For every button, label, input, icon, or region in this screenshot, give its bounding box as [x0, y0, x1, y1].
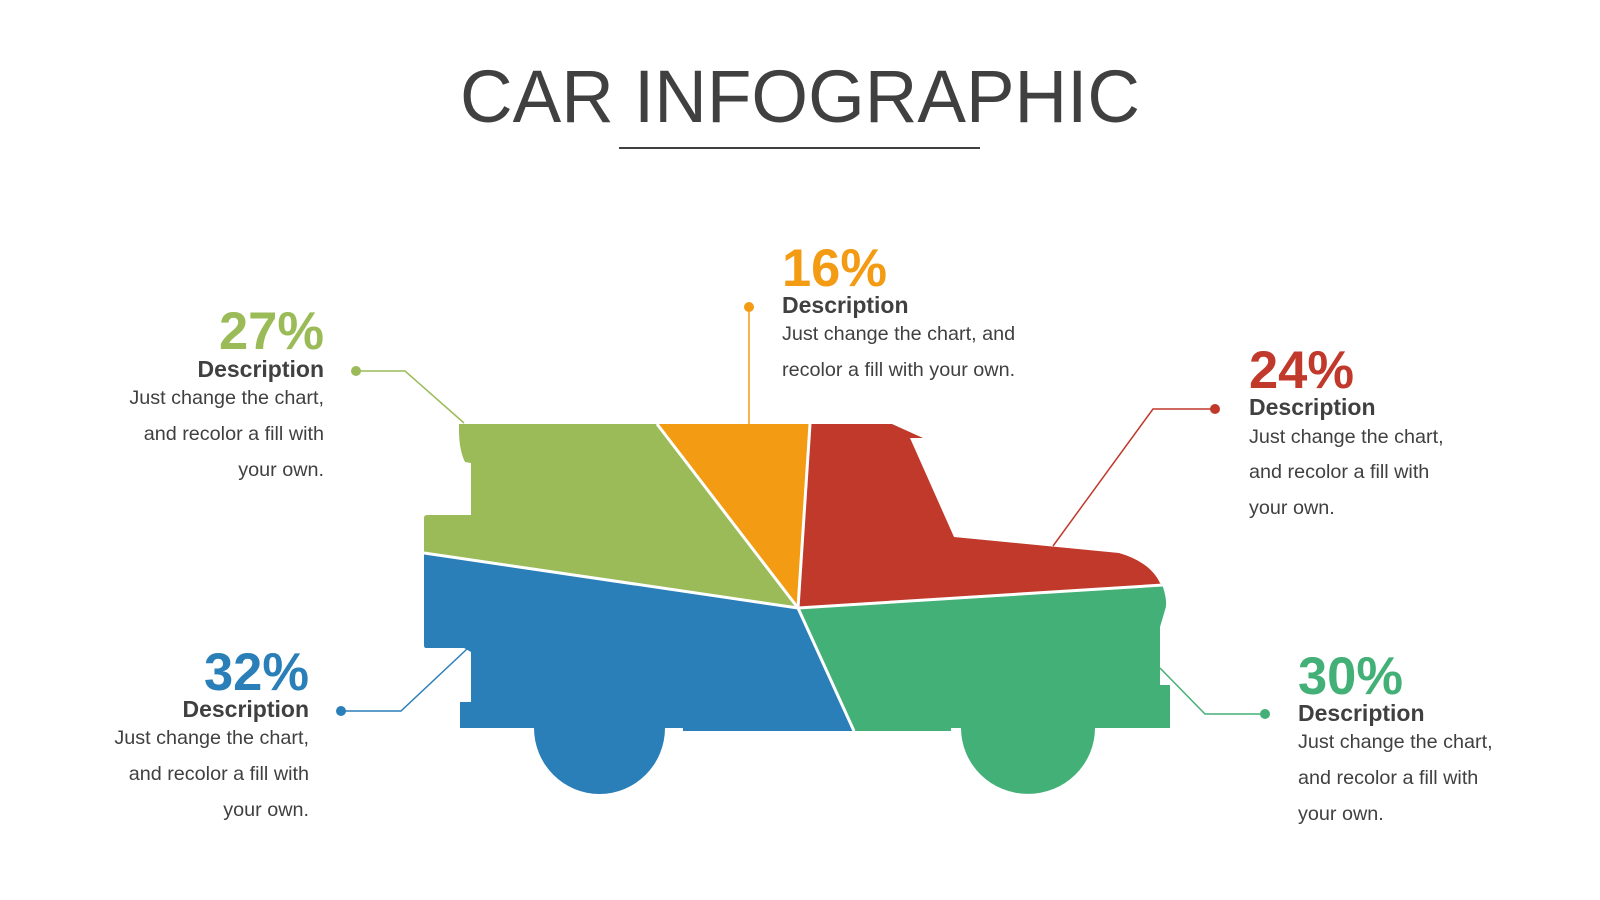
- callout: 24%: 24%: [1249, 341, 1354, 400]
- callout: 30%: [1160, 647, 1493, 825]
- callout: 16%: 16%: [782, 239, 887, 298]
- callout: 30%: your own.: [1298, 803, 1384, 825]
- callout: 30%: 30%: [1298, 647, 1403, 706]
- callout: 32%: [114, 643, 467, 821]
- callout: 24%: [1053, 341, 1444, 546]
- callout: 32%: Just change the chart,: [114, 727, 309, 749]
- callout: 27%: and recolor a fill with: [144, 423, 324, 445]
- callout: 24%: Description: [1249, 394, 1376, 420]
- callout: 27%: [129, 302, 464, 481]
- callout: 27%: your own.: [238, 459, 324, 481]
- callout: 24%: and recolor a fill with: [1249, 461, 1429, 483]
- callout: 30%: Just change the chart,: [1298, 731, 1493, 753]
- callout: 24%: your own.: [1249, 497, 1335, 519]
- callout: 32%: your own.: [223, 799, 309, 821]
- callout: 16%: Description: [782, 292, 909, 318]
- callout: 27%: 27%: [219, 302, 324, 361]
- callout: 32%: and recolor a fill with: [129, 763, 309, 785]
- car pie chart: [424, 424, 1170, 794]
- callout: 16%: Just change the chart, and: [782, 323, 1015, 345]
- wedge: orange 16%: [657, 424, 810, 608]
- callout: 16%: [744, 239, 1015, 424]
- callout: 30%: Description: [1298, 700, 1425, 726]
- wedge: green 30%: [800, 585, 1170, 794]
- wedge: blue 32%: [424, 554, 852, 794]
- wedge: green 27%: [424, 424, 794, 606]
- wedge: red 24%: [800, 424, 1162, 606]
- title: CAR INFOGRAPHIC: [460, 55, 1140, 138]
- callout: 24%: Just change the chart,: [1249, 426, 1444, 448]
- callout: 27%: Just change the chart,: [129, 387, 324, 409]
- callout: 32%: Description: [182, 696, 309, 722]
- callout: 32%: 32%: [204, 643, 309, 702]
- callout: 30%: and recolor a fill with: [1298, 767, 1478, 789]
- callout: 27%: Description: [197, 356, 324, 382]
- callout: 16%: recolor a fill with your own.: [782, 359, 1015, 381]
